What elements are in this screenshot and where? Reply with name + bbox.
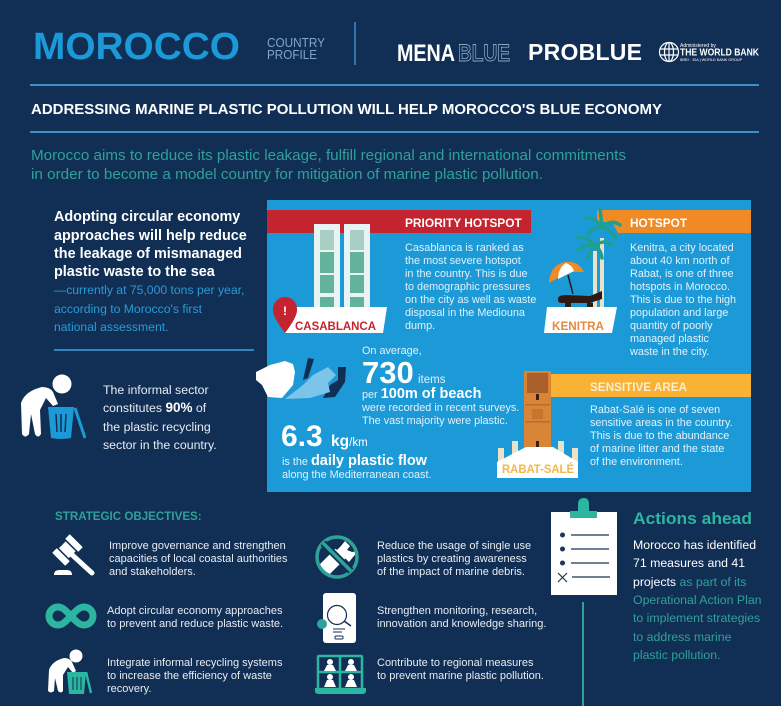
objective: informal: Integrate informal recycling systems xyxy=(107,657,283,669)
banner: sensitive area: SENSITIVE AREA xyxy=(590,381,688,394)
subtitle: country profile: COUNTRY xyxy=(267,36,326,50)
text: Kenitra: hotspots in Morocco. xyxy=(630,281,730,293)
panel: actions ahead: 71 measures and 41 xyxy=(633,556,745,570)
text: Rabat-Salé: This is due to the abundance xyxy=(590,430,729,442)
heading: ADDRESSING MARINE PLASTIC POLLUTION WILL HELP MOROCCO'S BLUE ECONOMY xyxy=(31,102,662,118)
icon: Casablanca towers: CASABLANCA xyxy=(295,319,376,333)
icon: circular economy xyxy=(49,607,93,625)
objective: monitoring xyxy=(377,605,546,630)
stat: 6.3 kg/km xyxy=(281,420,432,481)
stat: 6.3 kg/km: along the Mediterranean coast. xyxy=(282,469,432,481)
objective: governance: capacities of local coastal authorities xyxy=(109,553,288,565)
objective: regional: Contribute to regional measures xyxy=(377,657,534,669)
stat: 730 items: On average, xyxy=(362,345,422,357)
panel: actions ahead: Actions ahead xyxy=(633,509,752,528)
panel: actions ahead: Morocco has identified xyxy=(633,538,756,552)
text: Kenitra: This is due to the high xyxy=(630,294,736,306)
text: Casablanca: Casablanca is ranked as xyxy=(405,242,524,254)
stat: 730 items: items xyxy=(418,374,446,386)
text: Rabat-Salé: of the environment. xyxy=(590,456,683,468)
icon: Casablanca towers xyxy=(273,224,387,333)
logo: The World Bank xyxy=(660,42,759,62)
subtitle: country profile xyxy=(267,36,326,62)
icon: plastic waste xyxy=(256,358,346,399)
stat: 6.3 kg/km: 6.3 kg/km xyxy=(281,420,368,453)
objective: informal xyxy=(107,657,283,695)
logo: The World Bank: THE WORLD BANK xyxy=(680,48,759,58)
text: Kenitra: quantity of poorly xyxy=(630,320,713,332)
objective: circular xyxy=(107,605,283,630)
text: Casablanca: on the city as well as waste xyxy=(405,294,536,306)
icon: clipboard xyxy=(551,498,617,595)
subtitle: country profile: PROFILE xyxy=(267,48,317,62)
stat: 730 items: per 100m of beach xyxy=(362,386,481,402)
text block: circular economy: Adopting circular economy xyxy=(54,209,240,225)
panel: map of hotspots xyxy=(256,200,751,492)
objective: monitoring: Strengthen monitoring, research, xyxy=(377,605,537,617)
icon: no single use plastics xyxy=(317,537,358,577)
icon: Kenitra palms and sunbed: KENITRA xyxy=(552,319,604,333)
objective: monitoring: innovation and knowledge sharing. xyxy=(377,618,546,630)
text: Rabat-Salé: Rabat-Salé is one of seven xyxy=(590,404,720,416)
text block: circular economy: approaches will help reduce xyxy=(54,228,247,244)
text block: circular economy: national assessment. xyxy=(54,320,168,334)
text block: informal sector: sector in the country. xyxy=(103,438,217,452)
text block: informal sector: constitutes 90% of xyxy=(103,400,207,415)
text block: circular economy: —currently at 75,000 tons per year, xyxy=(54,283,244,297)
text: Kenitra: waste in the city. xyxy=(629,346,709,358)
text: Kenitra: managed plastic xyxy=(630,333,710,345)
logo: MENA Blue xyxy=(397,40,510,67)
panel: actions ahead: to address marine xyxy=(633,630,732,644)
panel: actions ahead: Operational Action Plan xyxy=(633,593,762,607)
text: Rabat-Salé xyxy=(590,404,733,468)
stat: 730 items: 730 xyxy=(362,355,414,390)
objective: circular: to prevent and reduce plastic waste. xyxy=(107,618,283,630)
text block: circular economy xyxy=(54,209,247,334)
objective: plastics xyxy=(377,540,531,578)
panel: actions ahead: plastic pollution. xyxy=(633,648,720,662)
logo: PROBLUE: PROBLUE xyxy=(528,39,642,65)
text: Kenitra: about 40 km north of xyxy=(630,255,730,267)
banner: hotspot: HOTSPOT xyxy=(630,216,688,230)
objective: governance: Improve governance and strengthen xyxy=(109,540,286,552)
intro text xyxy=(31,148,626,183)
text: Kenitra: Rabat, is one of three xyxy=(630,268,734,280)
panel: actions ahead: to implement strategies xyxy=(633,611,760,625)
text: Rabat-Salé: sensitive areas in the country. xyxy=(590,417,733,429)
objective: plastics: plastics by creating awareness xyxy=(377,553,527,565)
stat: 6.3 kg/km: is the daily plastic flow xyxy=(282,453,428,469)
icon: phone with magnifier xyxy=(317,593,356,643)
objective: plastics: of the impact of marine debris. xyxy=(377,566,525,578)
intro text: in order to become a model country for mitigation of marine plastic pollution. xyxy=(31,167,543,183)
objective: informal: recovery. xyxy=(107,683,151,695)
banner: priority hotspot xyxy=(267,210,531,233)
text block: informal sector xyxy=(103,383,217,452)
heading: strategic objectives: STRATEGIC OBJECTIVES: xyxy=(55,510,202,523)
title: Morocco: MOROCCO xyxy=(33,26,240,68)
icon: Hassan tower, Rabat-Salé: RABAT-SALÉ xyxy=(502,463,574,476)
text: Casablanca: the most severe hotspot xyxy=(405,255,521,267)
text: Casablanca: dump. xyxy=(405,320,435,332)
logo: The World Bank: Administered by xyxy=(680,43,716,49)
banner: hotspot xyxy=(597,210,751,233)
icon: gavel xyxy=(51,533,92,575)
icon: regional video meeting xyxy=(315,656,366,694)
text: Kenitra: population and large xyxy=(630,307,728,319)
icon: informal recycling xyxy=(48,650,91,694)
text block: informal sector: The informal sector xyxy=(103,383,209,397)
text block: circular economy: plastic waste to the sea xyxy=(54,264,216,280)
icon: Kenitra palms and sunbed xyxy=(544,210,620,333)
panel: actions ahead xyxy=(633,509,762,662)
text: Casablanca xyxy=(405,242,536,332)
intro text: Morocco aims to reduce its plastic leakage, fulfill regional and international commitments xyxy=(31,148,626,164)
text: Kenitra xyxy=(629,242,736,358)
text: Kenitra: Kenitra, a city located xyxy=(630,242,734,254)
logo: MENA Blue: BLUE xyxy=(458,40,510,67)
objective: plastics: Reduce the usage of single use xyxy=(377,540,531,552)
logo: MENA Blue: MENA xyxy=(397,40,455,67)
stat: 730 items xyxy=(361,345,519,427)
icon: waste picker xyxy=(21,374,85,439)
objective: governance xyxy=(109,540,288,578)
objective: governance: and stakeholders. xyxy=(109,566,196,578)
text block: circular economy: the leakage of mismanaged xyxy=(54,246,242,262)
banner: priority hotspot: PRIORITY HOTSPOT xyxy=(405,216,522,230)
banner: sensitive area xyxy=(551,374,751,397)
text: Casablanca: disposal in the Mediouna xyxy=(405,307,526,319)
stat: 730 items: The vast majority were plastic. xyxy=(362,415,508,427)
text block: circular economy: according to Morocco's first xyxy=(54,302,203,316)
objective: regional: to prevent marine plastic pollution. xyxy=(377,670,544,682)
text: Casablanca: to demographic pressures xyxy=(405,281,531,293)
icon: Hassan tower, Rabat-Salé xyxy=(497,371,578,478)
stat: 730 items: were recorded in recent surveys. xyxy=(361,402,519,414)
icon: Casablanca towers: ! xyxy=(283,304,287,318)
text: Rabat-Salé: of marine litter and the state xyxy=(590,443,724,455)
logo: The World Bank: IBRD · IDA | WORLD BANK GROUP xyxy=(680,58,743,62)
text: Casablanca: in the country. This is due xyxy=(405,268,528,280)
objective: informal: to increase the efficiency of waste xyxy=(107,670,272,682)
text block: informal sector: the plastic recycling xyxy=(103,420,211,434)
panel: actions ahead: projects as part of its xyxy=(633,575,746,589)
objective: circular: Adopt circular economy approaches xyxy=(107,605,283,617)
objective: regional xyxy=(377,657,544,682)
